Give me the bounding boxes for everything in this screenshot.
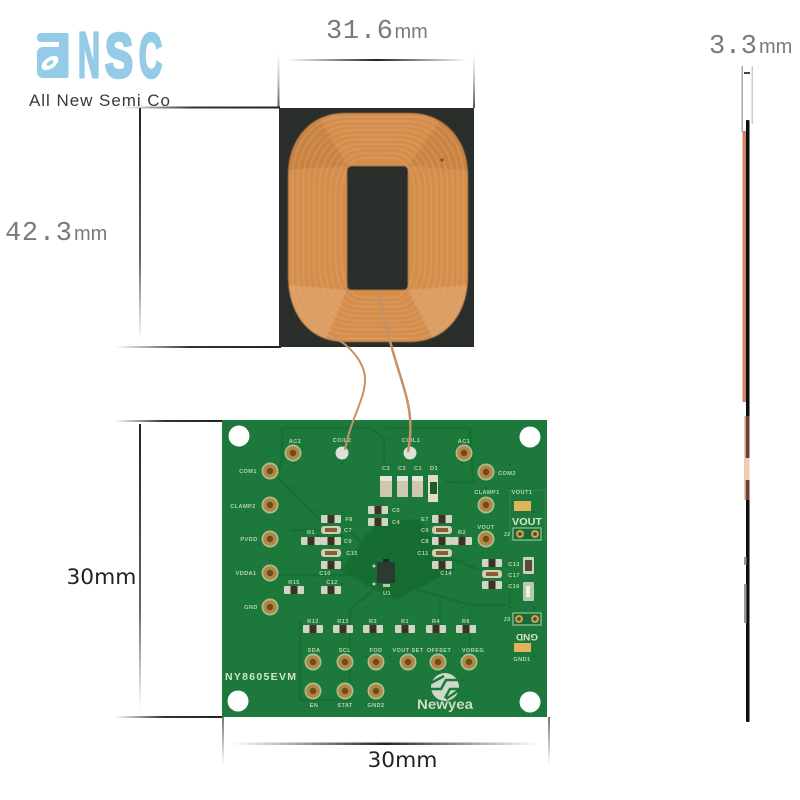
dimension: thickness 3.3mm bbox=[709, 32, 792, 62]
silkscreen labels: CLAMP1 bbox=[474, 490, 500, 496]
logo mark letters bbox=[37, 19, 162, 91]
silkscreen labels: EN bbox=[310, 703, 318, 709]
silkscreen labels: VOUT bbox=[477, 525, 495, 531]
coil pad: black backing sheet bbox=[279, 108, 474, 347]
silkscreen labels: C13 bbox=[508, 562, 520, 568]
silkscreen labels: R1 bbox=[401, 619, 409, 625]
silkscreen labels: U1 bbox=[383, 591, 391, 597]
surface mount components bbox=[284, 475, 534, 633]
dimension: coil width 31.6mm: 31.6 bbox=[326, 17, 394, 47]
logo: ANSC All New Semi Co bbox=[29, 19, 170, 110]
silkscreen labels: C9 bbox=[344, 539, 352, 545]
logo mark letters: C bbox=[139, 22, 162, 91]
silkscreen labels: C16 bbox=[508, 584, 520, 590]
silkscreen labels: C3 bbox=[382, 466, 390, 472]
silkscreen labels: C10 bbox=[319, 571, 331, 577]
silkscreen labels: D1 bbox=[430, 466, 438, 472]
silkscreen labels: R15 bbox=[288, 580, 300, 586]
silkscreen mirrored GND heading: GND bbox=[516, 631, 538, 642]
silkscreen labels: VOUT SET bbox=[392, 648, 424, 654]
silkscreen labels: GND bbox=[244, 605, 258, 611]
silkscreen labels: C11 bbox=[417, 551, 429, 557]
Newyea logo bbox=[417, 673, 474, 712]
dimension: board height 30mm: 30mm bbox=[66, 565, 136, 590]
IC chip U1 bbox=[372, 559, 395, 587]
silkscreen labels: J3 bbox=[503, 617, 511, 623]
silkscreen labels bbox=[230, 438, 532, 709]
logo mark letters: N bbox=[78, 19, 100, 91]
silkscreen labels: R13 bbox=[337, 619, 349, 625]
side view of coil and board stack bbox=[742, 66, 753, 722]
silkscreen labels: SCL bbox=[339, 648, 351, 654]
silkscreen labels: STAT bbox=[337, 703, 353, 709]
silkscreen labels: AC2 bbox=[289, 439, 301, 445]
silkscreen labels: FOD bbox=[369, 648, 383, 654]
silkscreen labels: CLAMP2 bbox=[230, 504, 256, 510]
silkscreen labels: GND1 bbox=[513, 657, 531, 663]
silkscreen labels: C8 bbox=[421, 539, 429, 545]
dimension: coil width 31.6mm bbox=[278, 17, 475, 108]
silkscreen labels: C4 bbox=[392, 520, 400, 526]
silkscreen labels: GND2 bbox=[367, 703, 385, 709]
silkscreen labels: C5 bbox=[392, 508, 400, 514]
silkscreen labels: PVDD bbox=[240, 537, 258, 543]
silkscreen labels: COM1 bbox=[239, 469, 257, 475]
dimension: board width 30mm: 30mm bbox=[368, 748, 437, 773]
silkscreen labels: R12 bbox=[307, 619, 319, 625]
silkscreen labels: COM2 bbox=[498, 471, 516, 477]
dimension: coil width 31.6mm: mm bbox=[394, 21, 428, 43]
dimension: coil height 42.3mm bbox=[5, 106, 281, 348]
board substrate bbox=[222, 420, 547, 717]
silkscreen labels: F8 bbox=[345, 517, 353, 523]
silkscreen labels: C15 bbox=[346, 551, 358, 557]
silkscreen labels: VDDA1 bbox=[236, 571, 256, 577]
ground header J3 and gold GND pad bbox=[513, 613, 541, 652]
silkscreen labels: SDA bbox=[307, 648, 321, 654]
silkscreen labels: C17 bbox=[508, 573, 520, 579]
silkscreen labels: C12 bbox=[326, 580, 338, 586]
dimension: thickness 3.3mm: mm bbox=[759, 36, 792, 58]
output header J2 and gold VOUT pad bbox=[513, 501, 541, 540]
silkscreen labels: C14 bbox=[440, 571, 452, 577]
silkscreen labels: COIL2 bbox=[333, 438, 351, 444]
silkscreen labels: R3 bbox=[369, 619, 377, 625]
logo mark letters: a bbox=[39, 30, 67, 88]
coil lead wires bbox=[333, 292, 410, 452]
silkscreen labels: VOUT1 bbox=[512, 490, 532, 496]
silkscreen labels: VOREG bbox=[462, 648, 484, 654]
printed circuit board bbox=[222, 420, 547, 717]
silkscreen labels: OFFSET bbox=[427, 648, 451, 654]
silkscreen labels: E7 bbox=[421, 517, 429, 523]
silkscreen labels: C7 bbox=[344, 528, 352, 534]
silkscreen labels: AC1 bbox=[458, 439, 470, 445]
silkscreen labels: C2 bbox=[398, 466, 406, 472]
test point pads bbox=[262, 444, 494, 700]
silkscreen labels: C6 bbox=[421, 528, 429, 534]
mounting holes bbox=[228, 426, 540, 712]
dimension: coil height 42.3mm: mm bbox=[74, 223, 107, 245]
Newyea logo: Newyea bbox=[417, 697, 474, 712]
silkscreen labels: R4 bbox=[432, 619, 440, 625]
copper receiver coil bbox=[288, 113, 468, 342]
silkscreen labels: J2 bbox=[503, 532, 511, 538]
silkscreen labels: COIL1 bbox=[402, 438, 420, 444]
silkscreen labels: R6 bbox=[462, 619, 470, 625]
dimension: thickness 3.3mm: 3.3 bbox=[709, 32, 758, 62]
dimension: coil height 42.3mm: 42.3 bbox=[5, 219, 73, 249]
silkscreen labels: C1 bbox=[414, 466, 422, 472]
silkscreen labels: R2 bbox=[458, 530, 466, 536]
board name NY8605EVM: NY8605EVM bbox=[225, 671, 296, 683]
logo mark letters: S bbox=[105, 22, 133, 91]
silkscreen VOUT heading: VOUT bbox=[512, 516, 543, 528]
logo tagline: All New Semi Co bbox=[29, 91, 170, 110]
copper traces and dark planes bbox=[265, 428, 545, 700]
silkscreen labels: R1 bbox=[307, 530, 315, 536]
